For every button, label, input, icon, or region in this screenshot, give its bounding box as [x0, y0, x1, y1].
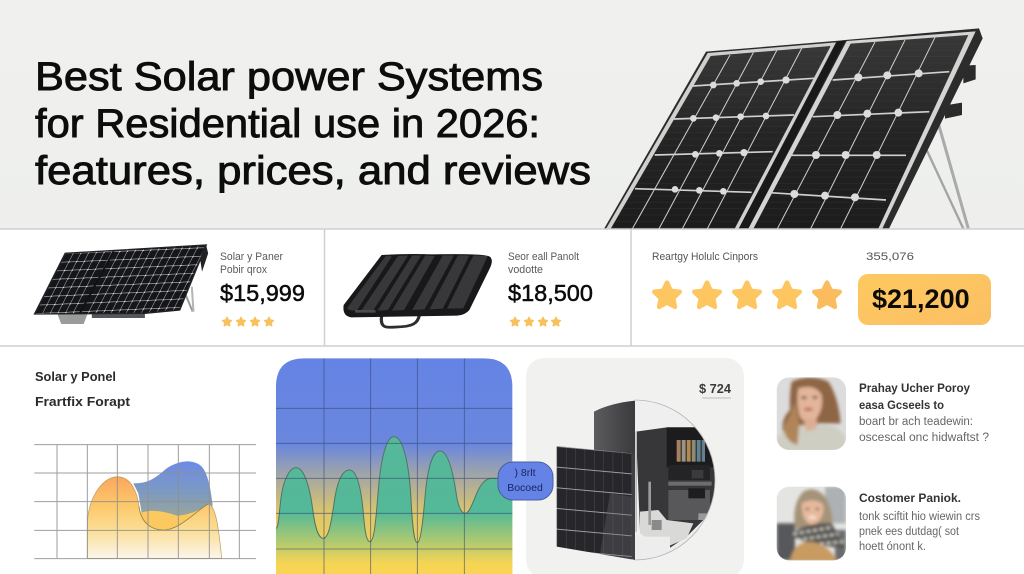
rating stars	[223, 317, 273, 326]
title	[35, 55, 591, 193]
product label: Solar y Paner	[220, 251, 283, 263]
testimonial two	[777, 487, 980, 562]
price: $15,999	[220, 280, 305, 306]
price label: $ 724	[699, 381, 732, 396]
testimonial text: boart br ach teadewin:	[859, 416, 973, 428]
icon: folded black battery pack	[343, 254, 492, 327]
price badge: $21,200	[872, 284, 970, 314]
hero illustration: folding solar panel on stand	[603, 28, 983, 230]
testimonial one	[777, 377, 989, 452]
divider lines	[0, 229, 1024, 346]
title: for Residential use in 2026:	[35, 102, 540, 146]
testimonial text: oscescal onc hidwaftst ?	[859, 432, 989, 444]
price: $18,500	[508, 280, 593, 306]
testimonial text: Prahay Ucher Poroy	[859, 383, 971, 395]
testimonial text: pnek ees dutdag( sot	[859, 526, 960, 538]
portrait: woman with long hair	[777, 377, 846, 452]
panel: product one	[35, 245, 305, 326]
product label	[508, 251, 579, 276]
large rating stars	[654, 282, 840, 307]
testimonial text	[859, 493, 980, 553]
testimonial text	[859, 383, 989, 444]
product label: Seor eall Panolt	[508, 251, 579, 263]
area chart	[34, 445, 256, 559]
testimonial text: easa Gcseels to	[859, 400, 944, 412]
testimonial text: Costomer Paniok.	[859, 493, 961, 505]
product label: vodotte	[508, 264, 543, 276]
panel: product three	[652, 251, 991, 325]
icon: small solar panel	[35, 245, 208, 324]
panel: forecast chart	[34, 369, 256, 559]
chart heading: Solar y Ponel	[35, 369, 116, 384]
illustration: solar panel and home battery cabinet	[557, 400, 718, 560]
panel: hero background	[0, 0, 1024, 229]
portrait: girl with scarf	[777, 487, 846, 562]
product label: Reartgy Holulc Cinpors	[652, 251, 758, 263]
panel: equipment card	[526, 358, 744, 574]
chart heading	[35, 369, 131, 409]
product label: Pobir qrox	[220, 264, 267, 276]
panel: product two	[343, 251, 593, 327]
chart heading: Frartfix Forapt	[35, 394, 131, 409]
title: features, prices, and reviews	[35, 149, 591, 193]
reading value: 355,076	[866, 251, 914, 263]
product label	[220, 251, 283, 276]
rating stars	[511, 317, 560, 326]
testimonial text: hoett ónont k.	[859, 541, 926, 553]
title: Best Solar power Systems	[35, 55, 543, 99]
price badge	[858, 274, 991, 325]
callout pill: ) 8rlt	[514, 467, 536, 479]
callout pill	[498, 462, 553, 500]
callout pill: Bocoed	[507, 482, 543, 494]
panel: large wave chart	[276, 358, 512, 574]
testimonial text: tonk sciftit hio wiewin crs	[859, 511, 980, 523]
